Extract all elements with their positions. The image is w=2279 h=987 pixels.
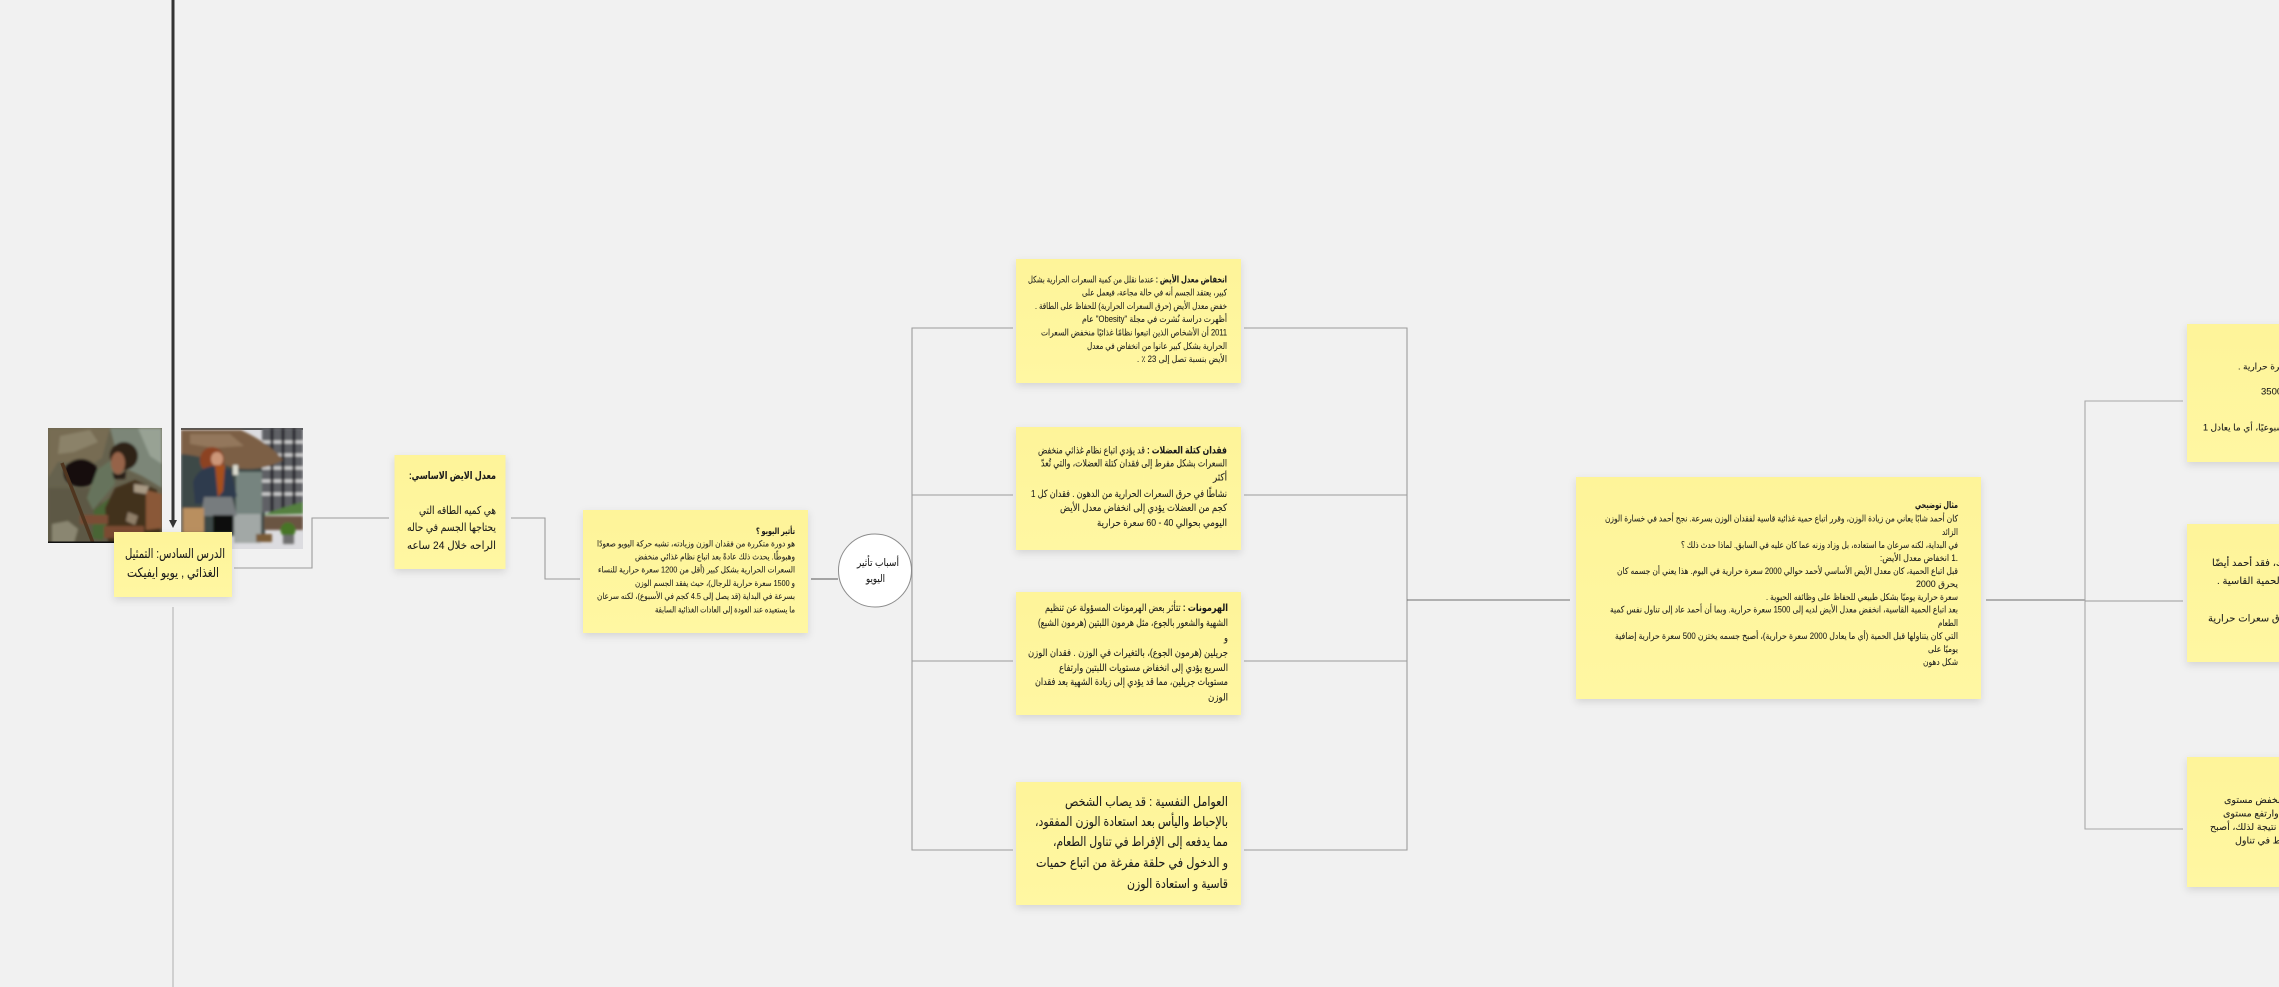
connector: cause cards to example note — [1244, 328, 1407, 850]
sticky note: lesson title — [114, 532, 232, 597]
card: hormones: جريلين (هرمون الجوع)، بالتغيرات في الوزن . فقدان الوزن — [1028, 648, 1228, 659]
card: loss of muscle mass: نشاطًا في حرق السعرات الحرارية من الدهون . فقدان كل 1 — [1031, 486, 1227, 500]
sticky note: illustrative example of Ahmed: .1 انخفاض معدل الأيض: — [1880, 552, 1958, 563]
sticky note: illustrative example of Ahmed: قبل اتباع الحمية، كان معدل الأيض الأساسي لأحمد حوالي 2000 سعرة حرارية في اليوم. هذا يعني أن جسمه كان — [1617, 565, 1958, 576]
sticky note: illustrative example of Ahmed: مثال توضيحي — [1915, 500, 1958, 511]
card: psychological factors: العوامل النفسية : قد يصاب الشخص — [1065, 794, 1228, 810]
card: lower metabolic rate: أظهرت دراسة نُشرت في مجلة "Obesity" عام — [1082, 313, 1227, 324]
sticky note: what is the yo-yo effect: تأثير اليويو ؟ — [756, 525, 795, 537]
card: hormones: الوزن — [1208, 692, 1228, 704]
image: overweight modern woman outside an office — [181, 428, 303, 549]
card: loss of muscle mass: اليومي بحوالي 40 - 60 سعرة حرارية — [1097, 518, 1227, 529]
sticky note: illustrative example of Ahmed: التي كان يتناولها قبل الحمية (أي ما يعادل 2000 سعرة حرارية)، أصبح جسمه يختزن 500 سعرة حرارية إضافية — [1615, 630, 1958, 642]
card: loss of muscle mass: فقدان كتلة العضلات : قد يؤدي اتباع نظام غذائي منخفض — [1038, 446, 1227, 456]
sticky note: what is the yo-yo effect: ما يستعيده عند العودة إلى العادات الغذائية السابقة — [655, 604, 795, 616]
sticky note: illustrative example of Ahmed — [1576, 477, 1981, 699]
sticky note: lesson title: الغذائي , يويو ايفيكت — [127, 565, 219, 581]
card: psychological factors — [1016, 782, 1241, 905]
card: loss of muscle mass: السعرات بشكل مفرط إلى فقدان كتلة العضلات، والتي تُعدّ — [1041, 458, 1227, 470]
sticky note: basal metabolic rate definition — [394, 455, 506, 569]
card: loss of muscle mass: كجم من العضلات يؤدي إلى انخفاض معدل الأيض — [1060, 501, 1227, 514]
sticky note: what is the yo-yo effect — [583, 510, 808, 633]
connector: lesson note to basal rate note — [234, 518, 389, 568]
circle: causes of the yo-yo effect: أسباب تأثير — [856, 555, 899, 569]
connector: join to example note — [1407, 599, 1570, 601]
connector: yo-yo note to circle — [811, 578, 838, 580]
sticky note: illustrative example of Ahmed: شكل دهون — [1923, 657, 1958, 667]
circle: causes of the yo-yo effect — [838, 534, 912, 607]
card: psychological factors: و الدخول في حلقة مفرغة من اتباع حميات — [1036, 855, 1228, 871]
card: result calories stored (clipped at right edge) — [2187, 324, 2279, 462]
sticky note: illustrative example of Ahmed: سعرة حرارية يوميًا بشكل طبيعي للحفاظ على وظائفه الحيوية . — [1766, 592, 1958, 602]
connector: circle to four cause cards — [912, 328, 1013, 850]
connector: example note to result cards — [1986, 401, 2183, 829]
sticky note: what is the yo-yo effect: هو دورة متكررة من فقدان الوزن وزيادته، تشبه حركة اليويو صعودًا — [597, 538, 795, 548]
sticky note: illustrative example of Ahmed: في البداية، لكنه سرعان ما استعاده، بل وزاد وزنه عما كان عليه في السابق. لماذا حدث ذلك ؟ — [1681, 540, 1958, 550]
sticky note: illustrative example of Ahmed: الزائد — [1942, 527, 1958, 537]
sticky note: illustrative example of Ahmed: يوميًا على — [1928, 644, 1958, 654]
card: hormones — [1016, 592, 1241, 715]
card: psychological factors: قاسية و استعادة الوزن — [1127, 876, 1228, 892]
card: lower metabolic rate — [1016, 259, 1241, 383]
sticky note: basal metabolic rate definition: معدل الايض الاساسي: — [409, 470, 496, 482]
sticky note: what is the yo-yo effect: وهبوطًا. يحدث ذلك عادةً بعد اتباع نظام غذائي منخفض — [635, 550, 795, 562]
card: loss of muscle mass — [1016, 427, 1241, 550]
card: lower metabolic rate: خفض معدل الأيض (حرق السعرات الحرارية) للحفاظ على الطاقة . — [1035, 300, 1227, 311]
card: hormones: الهرمونات : تتأثر بعض الهرمونات المسؤولة عن تنظيم — [1045, 600, 1228, 614]
card: hormones: و — [1223, 633, 1228, 644]
sticky note: what is the yo-yo effect: بسرعة في البداية (قد يصل إلى 4.5 كجم في الأسبوع)، لكنه سرعان — [597, 591, 795, 602]
card: loss of muscle mass: أكثر — [1212, 470, 1227, 484]
card: lower metabolic rate: الحرارية بشكل كبير عانوا من انخفاض في معدل — [1087, 341, 1227, 351]
sticky note: what is the yo-yo effect: السعرات الحرارية بشكل كبير (أقل من 1200 سعرة حرارية للنساء — [598, 564, 795, 574]
sticky note: illustrative example of Ahmed: بعد اتباع الحمية القاسية، انخفض معدل الأيض لديه إلى 1500 سعرة حرارية. وبما أن أحمد عاد إلى تناول نفس كمية — [1610, 604, 1958, 616]
connector: lesson note continues down — [172, 607, 174, 987]
sticky note: lesson title: الدرس السادس: التمثيل — [125, 546, 225, 562]
card: hormones: السريع يؤدي إلى انخفاض مستويات اللبتين وارتفاع — [1059, 663, 1228, 674]
image: caveman at a cave — [48, 428, 162, 543]
sticky note: basal metabolic rate definition: الراحه خلال 24 ساعه — [407, 540, 496, 552]
sticky note: basal metabolic rate definition: هي كميه الطاقه التي — [419, 505, 496, 517]
card: result hormones (clipped at right edge) — [2187, 757, 2279, 887]
sticky note: illustrative example of Ahmed: يحرق 2000 — [1916, 579, 1958, 589]
sticky note: illustrative example of Ahmed: الطعام — [1938, 618, 1958, 628]
card: lower metabolic rate: الأيض بنسبة تصل إلى 23 ٪ . — [1137, 353, 1227, 365]
card: hormones: الشهية والشعور بالجوع، مثل هرمون اللبتين (هرمون الشبع) — [1038, 618, 1228, 629]
card: psychological factors: بالإحباط واليأس بعد استعادة الوزن المفقود، — [1035, 812, 1228, 830]
sticky note: basal metabolic rate definition: يحتاجها الجسم في حاله — [407, 522, 496, 534]
card: result muscle loss (clipped at right edge) — [2187, 524, 2279, 662]
card: hormones: مستويات جريلين، مما قد يؤدي إلى زيادة الشهية بعد فقدان — [1035, 677, 1228, 688]
arrow: from above into lesson note — [169, 0, 177, 528]
circle: causes of the yo-yo effect: اليويو — [865, 573, 885, 585]
card: lower metabolic rate: 2011 أن الأشخاص الذين اتبعوا نظامًا غذائيًا منخفض السعرات — [1041, 326, 1227, 338]
card: psychological factors: مما يدفعه إلى الإفراط في تناول الطعام، — [1053, 834, 1228, 850]
card: lower metabolic rate: انخفاض معدل الأيض : عندما نقلل من كمية السعرات الحرارية بشكل — [1028, 274, 1227, 286]
card: lower metabolic rate: كبير، يعتقد الجسم أنه في حالة مجاعة، فيعمل على — [1082, 286, 1228, 298]
sticky note: what is the yo-yo effect: و 1500 سعرة حرارية للرجال)، حيث يفقد الجسم الوزن — [635, 578, 795, 589]
sticky note: illustrative example of Ahmed: كان أحمد شابًا يعاني من زيادة الوزن، وقرر اتباع حمية غذائية قاسية لفقدان الوزن بسرعة. نجح أحمد في خسارة الوزن — [1605, 512, 1959, 524]
connector: basal rate note to yo-yo note — [511, 518, 580, 579]
